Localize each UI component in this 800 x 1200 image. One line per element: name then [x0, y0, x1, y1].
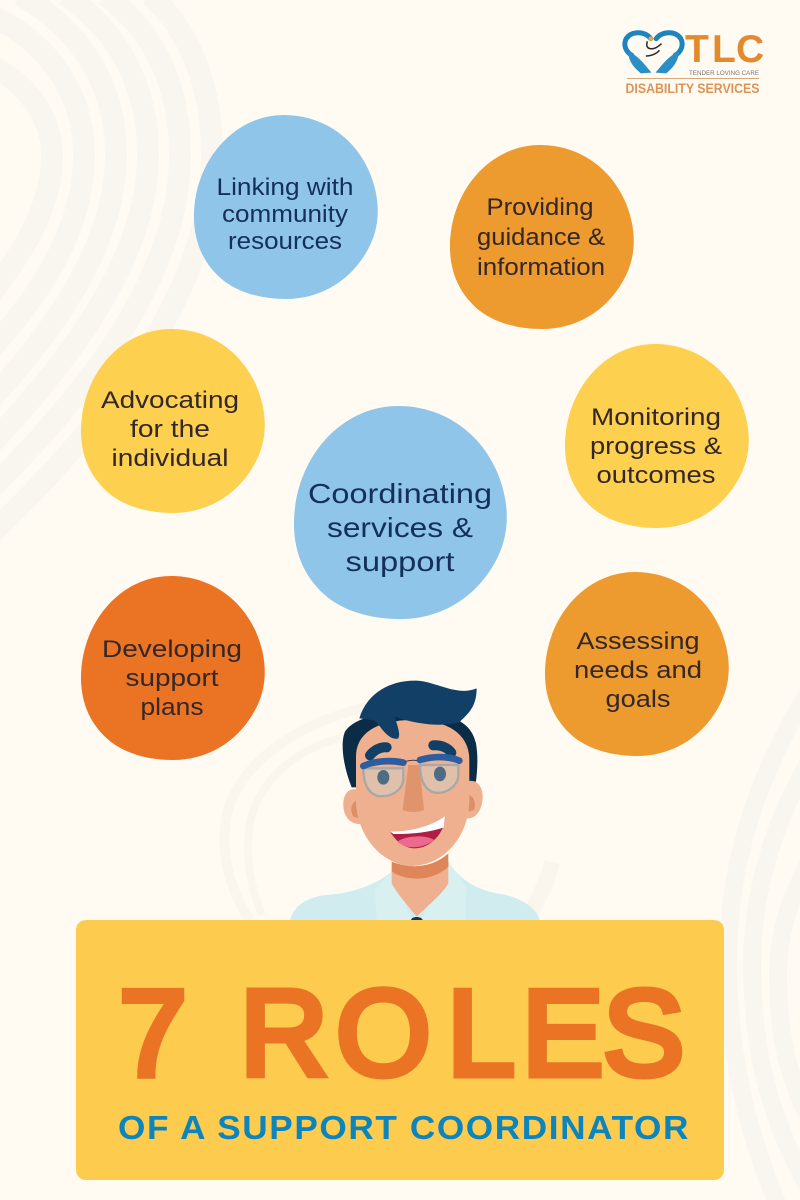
- label: Linking with community resources: Linking with: [216, 174, 354, 201]
- subtitle: of a support coordinator: OF A SUPPORT COORDINATOR: [118, 1109, 690, 1146]
- ears: [343, 781, 483, 824]
- icon: heart with hands: [625, 33, 682, 73]
- bubble: advocating for the individual: [81, 329, 265, 513]
- label: Advocating for the individual: individual: [112, 445, 228, 472]
- bubble: monitoring progress and outcomes: [565, 344, 749, 528]
- front hair: [359, 681, 477, 739]
- logo tagline: TENDER LOVING CARE: [689, 70, 760, 77]
- label: Developing support plans: plans: [140, 694, 204, 721]
- label: Coordinating services & support: services &: [327, 512, 473, 543]
- label: Developing support plans: Developing: [102, 636, 242, 663]
- bubble: coordinating services and support: [294, 406, 507, 619]
- smile: [390, 816, 445, 848]
- label: Assessing needs and goals: Assessing: [576, 628, 700, 655]
- label: Advocating for the individual: [101, 387, 239, 472]
- heading: 7 ROLES: 7 ROLES: [119, 965, 684, 1101]
- label: Providing guidance & information: [477, 194, 605, 281]
- bubble: linking with community resources: [194, 115, 378, 299]
- logo subtitle: DISABILITY SERVICES: [626, 81, 760, 96]
- label: Linking with community resources: resources: [228, 228, 342, 255]
- panel: title banner: [76, 920, 724, 1180]
- eyebrows: [370, 745, 451, 755]
- label: Coordinating services & support: [308, 478, 492, 577]
- glasses: [363, 765, 458, 796]
- shirt: [290, 862, 540, 920]
- label: Developing support plans: support: [126, 665, 219, 692]
- label: Monitoring progress & outcomes: Monitoring: [591, 404, 721, 431]
- logo: TLC Disability Services: [625, 28, 764, 96]
- label: Developing support plans: [102, 636, 242, 721]
- label: Providing guidance & information: information: [477, 254, 605, 281]
- label: Linking with community resources: [216, 174, 354, 255]
- nose: [403, 765, 424, 812]
- label: Advocating for the individual: for the: [130, 416, 210, 443]
- illustration: smiling man with glasses: [290, 681, 540, 920]
- label: Assessing needs and goals: goals: [606, 686, 670, 713]
- bubble: assessing needs and goals: [545, 572, 729, 756]
- label: Coordinating services & support: support: [346, 546, 455, 577]
- label: Coordinating services & support: Coordinating: [308, 478, 492, 509]
- label: Monitoring progress & outcomes: progress &: [590, 433, 722, 460]
- label: Linking with community resources: community: [222, 201, 348, 228]
- label: Advocating for the individual: Advocating: [101, 387, 239, 414]
- bubble: developing support plans: [81, 576, 265, 760]
- label: Providing guidance & information: guidance &: [477, 224, 605, 251]
- label: Assessing needs and goals: needs and: [574, 657, 702, 684]
- label: Providing guidance & information: Providing: [486, 194, 594, 221]
- logo wordmark TLC: TLC: [685, 28, 764, 71]
- back hair: [343, 713, 477, 787]
- label: Assessing needs and goals: [574, 628, 702, 713]
- label: Monitoring progress & outcomes: outcomes: [596, 462, 716, 489]
- bubble: providing guidance and information: [450, 145, 634, 329]
- label: Monitoring progress & outcomes: [590, 404, 722, 489]
- face: [356, 720, 469, 866]
